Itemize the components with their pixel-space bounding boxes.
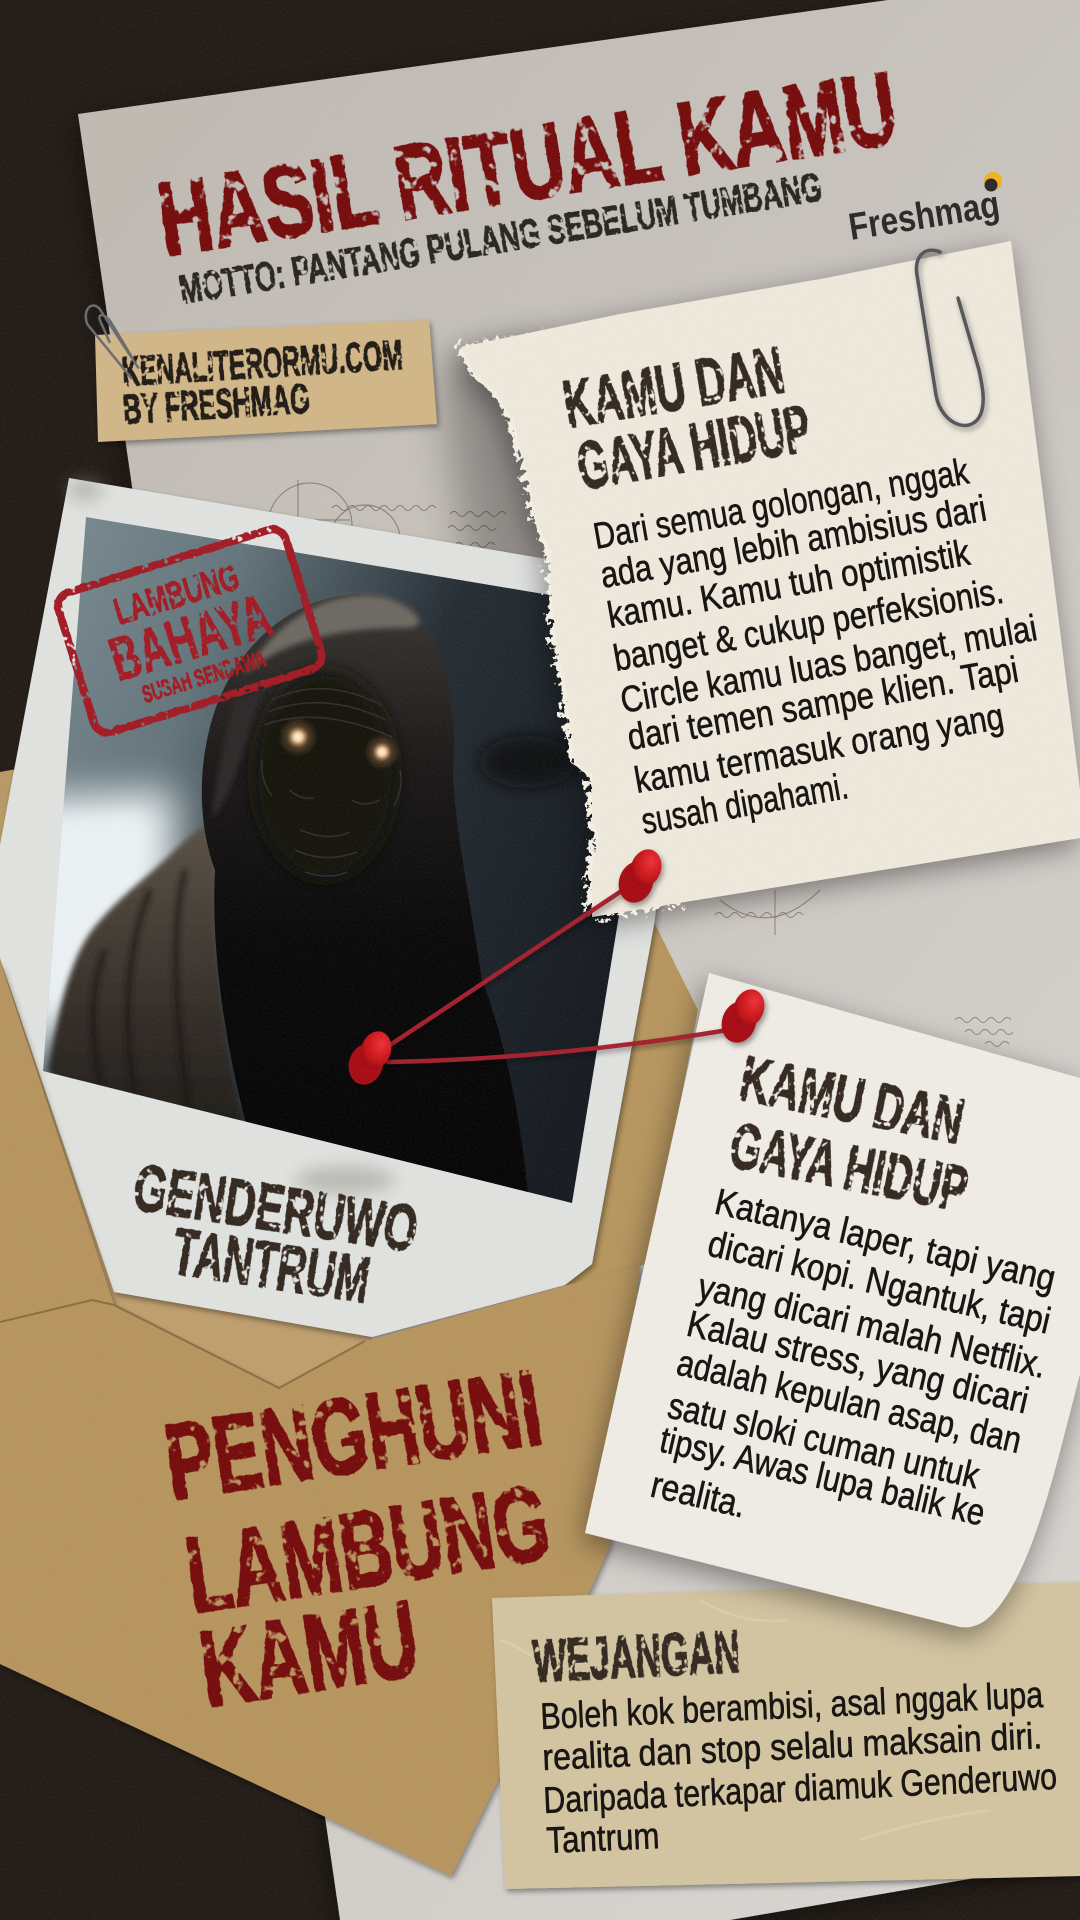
polaroid dirt bbox=[67, 478, 395, 1194]
icon: red push pin top bbox=[613, 845, 666, 907]
panel: torn paper note bbox=[456, 241, 1080, 917]
torn note body text: ada yang lebih ambisius dari bbox=[597, 488, 989, 596]
window light bbox=[20, 790, 175, 1060]
stamp: Lambung Bahaya: SUSAH SENDAWA bbox=[139, 645, 269, 709]
photo caption bbox=[129, 1150, 423, 1317]
paper creases bbox=[500, 1600, 990, 1840]
face bbox=[253, 670, 397, 880]
panel: tan cardboard label bbox=[95, 320, 437, 442]
torn note body text: kamu. Kamu tuh optimistik bbox=[604, 532, 973, 636]
icon: large paperclip bbox=[917, 250, 983, 425]
monster photo bbox=[43, 517, 619, 1203]
icon: red push pin centre bbox=[343, 1027, 396, 1089]
string: pin connections bbox=[388, 888, 728, 1062]
photo caption: GENDERUWO bbox=[129, 1150, 423, 1266]
white note body text: realita. bbox=[647, 1464, 750, 1525]
label text: BY FRESHMAG bbox=[122, 375, 311, 433]
torn note body text: kamu termasuk orang yang bbox=[631, 696, 1007, 801]
panel: kraft envelope front bbox=[0, 961, 640, 1876]
label text bbox=[121, 331, 404, 433]
stamp: Lambung Bahaya: LAMBUNG bbox=[109, 556, 244, 633]
hood highlight bbox=[245, 595, 419, 675]
dark cloak body bbox=[202, 593, 530, 1215]
envelope heading: KAMU bbox=[192, 1577, 426, 1730]
icon: small paperclip bbox=[73, 304, 150, 379]
icon: red push pin right bbox=[716, 985, 769, 1047]
wejangan heading: WEJANGAN bbox=[531, 1618, 741, 1695]
stamp: Lambung Bahaya: BAHAYA bbox=[102, 581, 280, 695]
photo caption: TANTRUM bbox=[168, 1214, 375, 1317]
decorative sketch: upper diagrams bbox=[260, 480, 506, 575]
torn note heading bbox=[558, 333, 816, 505]
white note body text: Kalau stress, yang dicari bbox=[683, 1303, 1032, 1421]
white note body text bbox=[647, 1181, 1060, 1533]
decorative sketch: middle diagram bbox=[715, 890, 1013, 1046]
white note heading: KAMU DAN bbox=[734, 1042, 970, 1158]
torn note heading: GAYA HIDUP bbox=[572, 391, 816, 505]
logo: Freshmag: Freshmag bbox=[846, 184, 1003, 249]
white note heading bbox=[724, 1042, 974, 1226]
envelope heading bbox=[157, 1346, 557, 1730]
soft shadow from torn note bbox=[440, 340, 570, 640]
wejangan body text bbox=[540, 1674, 1058, 1861]
torn note body text: Dari semua golongan, nggak bbox=[590, 450, 972, 557]
stamp: Lambung Bahaya bbox=[55, 526, 325, 736]
label text: KENALITERORMU.COM bbox=[121, 331, 404, 395]
panel: white curled note bbox=[585, 973, 1080, 1627]
torn note heading: KAMU DAN bbox=[558, 333, 789, 443]
panel: polaroid photo bbox=[0, 478, 700, 1337]
ragged mantle bbox=[44, 824, 245, 1122]
white note body text: tipsy. Awas lupa balik ke bbox=[656, 1419, 989, 1533]
eye glows bbox=[278, 717, 400, 770]
envelope back flaps bbox=[0, 768, 698, 1395]
envelope heading: LAMBUNG bbox=[178, 1461, 557, 1636]
torn note body text: banget & cukup perfeksionis. bbox=[610, 570, 1006, 679]
envelope heading: PENGHUNI bbox=[157, 1346, 549, 1523]
wejangan body text: Tantrum bbox=[546, 1815, 660, 1861]
panel: wejangan note bbox=[492, 1582, 1080, 1889]
torn note body text: susah dipahami. bbox=[638, 765, 851, 842]
torn note body text bbox=[590, 450, 1040, 842]
white note body text: satu sloki cuman untuk bbox=[664, 1385, 984, 1496]
